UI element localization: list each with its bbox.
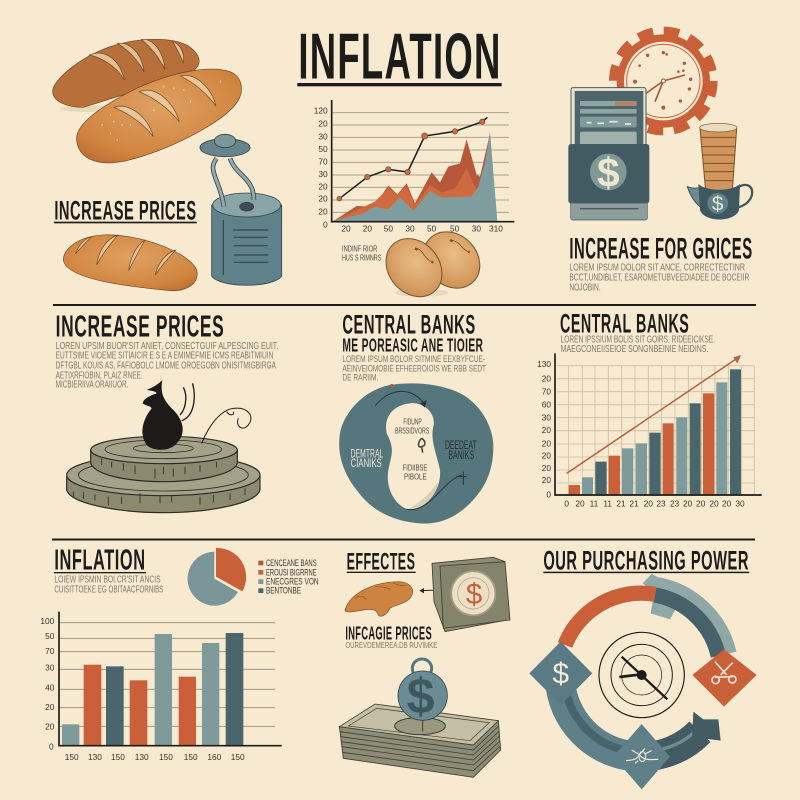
diagram: central bank blob — [339, 383, 493, 524]
diagram: central bank blob: DEEDEAT — [445, 438, 477, 452]
rising bar chart — [537, 353, 762, 508]
icon: bills with dollar medal — [432, 557, 510, 632]
icon: bird silhouette — [142, 380, 251, 450]
panel: effects and purchasing power — [339, 545, 757, 789]
icon: dark bread loaf — [53, 39, 199, 112]
subheading: ME POREASIC ANE TIOIER — [342, 335, 483, 356]
text block: central banks body — [342, 354, 486, 382]
panel: main title and area chart — [297, 19, 514, 308]
area and line chart: 30 — [318, 169, 328, 179]
rising bar chart: 11 — [603, 498, 612, 508]
rising bar chart: 23 — [656, 498, 666, 508]
pie legend — [258, 558, 319, 596]
diagram: central bank blob: DEMTRAL — [351, 446, 384, 460]
text block: central banks right body — [561, 334, 715, 355]
divider: lower rule — [52, 538, 755, 540]
chart caption: INDINF RIOR — [342, 244, 377, 254]
rising bar chart: 21 — [629, 498, 639, 508]
icon: clock target — [599, 632, 684, 718]
bar chart: 100 — [40, 616, 55, 626]
icon: money stack with weight — [339, 659, 501, 777]
area and line chart: 70 — [318, 157, 328, 167]
heading: central banks: CENTRAL BANKS — [342, 309, 476, 339]
text block: inflation body: CUISITTOEKE EG OBITAACFORNIBS — [54, 584, 164, 595]
area and line chart: 50 — [427, 224, 437, 234]
panel: increase prices middle — [56, 310, 278, 513]
panel: inflation charts — [40, 544, 319, 762]
icon: small bread loaf — [63, 235, 197, 291]
text block: prices body: LOREN UPSIM BUOR'SIT ANIET, CONSECTGUIF ALPESCING EUIT. — [56, 341, 278, 352]
rising bar chart: 20 — [542, 425, 551, 435]
diagram: purchasing power cycle — [529, 574, 757, 789]
rising bar chart: 20 — [542, 373, 551, 383]
icon: cash machine: $ — [597, 150, 620, 196]
bar chart: 30 — [45, 663, 55, 673]
rising bar chart: 20 — [542, 451, 551, 461]
diagram: central bank blob: CIANIKS — [351, 456, 382, 470]
divider: upper rule — [53, 304, 756, 306]
icon: bread slice — [345, 582, 413, 616]
rising bar chart: 20 — [696, 498, 706, 508]
bar chart: 40 — [45, 683, 55, 693]
area and line chart: 30 — [405, 224, 415, 234]
text block: grices body — [569, 263, 749, 293]
area and line chart: 50 — [450, 224, 460, 234]
title — [297, 19, 502, 92]
text block: central banks body: LOREM IPSUM BOLOR SITMINE EEXBYFCUE- — [342, 354, 485, 364]
bar chart: 150 — [111, 752, 125, 762]
bar chart: 70 — [45, 646, 55, 656]
icon: gear clock — [614, 32, 713, 130]
icon: tin can with lid — [200, 134, 282, 285]
bar chart: 160 — [207, 752, 222, 762]
text block: prices body: DFTGBL KOUIS AS, FAFIOBOLC LMOME OROEGOBN ONISITMIGBIRGA — [56, 361, 276, 372]
icon: large bread loaf — [77, 69, 241, 163]
pie chart — [188, 548, 246, 606]
area and line chart: 310 — [489, 224, 503, 234]
heading: effectes: EFFECTES — [347, 548, 415, 575]
panel: savings machine and rising costs — [568, 32, 753, 293]
text block: prices body: EUTTSIME VIOEME SITIAICIR E S E A EMIMEFMIE ICMS REABITMIUIN — [56, 351, 273, 362]
area and line chart: 120 — [314, 106, 328, 116]
icon: coffee cup stack — [687, 123, 752, 219]
pie legend: BENTONBE — [266, 586, 301, 596]
diagram: central bank blob: PIBOLE — [404, 472, 427, 482]
icon: potatoes — [374, 220, 491, 308]
diagram: central bank blob: FIDUNP — [403, 417, 422, 427]
area and line chart: 30 — [318, 131, 328, 141]
text block: infcagie caption: OUREVDEMEREA.DB RUVIMKE — [345, 641, 437, 650]
panel: effects and purchasing power: INFCAGIE PRICES — [345, 622, 432, 643]
chart caption: HUS S RIMNRS — [342, 253, 381, 263]
text block: prices body: MICBIERIIVA ORAIIUOR. — [56, 380, 128, 391]
rising bar chart: 11 — [590, 498, 599, 508]
heading: central banks right: CENTRAL BANKS — [560, 309, 689, 339]
rising bar chart: 60 — [542, 399, 551, 409]
panel: bread and can — [53, 39, 282, 291]
icon: money stack with weight: $ — [407, 668, 435, 724]
heading: inflation — [54, 544, 146, 576]
area and line chart — [314, 100, 514, 234]
rising bar chart: 20 — [683, 498, 693, 508]
area and line chart: 20 — [341, 224, 351, 234]
text block: grices body: NOJOBIN. — [569, 282, 601, 293]
panel: central banks diagram — [339, 309, 762, 524]
rising bar chart: 30 — [542, 412, 551, 422]
text block: central banks body: DE RARIIM. — [342, 372, 378, 382]
text block: central banks right body: LOREN IPSSIUM BOLIS SIT GOIRS. RIDEEICIKSE. — [561, 334, 715, 345]
rising bar chart: 20 — [575, 498, 585, 508]
pie legend: ENECGRES VON — [266, 577, 319, 587]
title: INFLATION — [298, 19, 502, 92]
text block: inflation body — [54, 575, 164, 595]
bar chart: 20 — [45, 721, 55, 731]
area and line chart: 20 — [318, 206, 328, 216]
heading: increase prices: INCREASE PRICES — [56, 310, 224, 344]
pie legend: EROUSI BIGRRNE — [266, 567, 317, 577]
text block: central banks right body: MAEGCONEIISEIOE SONGNBEINIE NEIDINS. — [561, 344, 708, 355]
icon: dollar diamond — [529, 642, 592, 705]
diagram: central bank blob: BRSSIDVORS — [395, 425, 429, 435]
area and line chart: 30 — [472, 224, 481, 234]
rising bar chart: 23 — [670, 498, 680, 508]
bar chart: 20 — [45, 702, 55, 712]
bar chart: 130 — [88, 752, 102, 762]
area and line chart: 0 — [323, 219, 328, 229]
icon: bills with dollar medal: $ — [466, 578, 482, 611]
bar chart: 50 — [45, 631, 55, 641]
rising bar chart: 20 — [542, 438, 551, 448]
text block: central banks body: AEINVEIOMOBIE EFHEEROIOIS WE RBB SEDT — [342, 363, 486, 373]
rising bar chart: 20 — [644, 498, 653, 508]
icon: dollar diamond: $ — [552, 657, 569, 690]
bar chart: 150 — [231, 752, 245, 762]
text block: prices body — [56, 341, 278, 391]
rising bar chart: 130 — [537, 359, 551, 369]
bar chart: 150 — [65, 752, 79, 762]
area and line chart: 20 — [318, 181, 328, 191]
icon: network diamond — [613, 724, 670, 789]
rising bar chart: 20 — [709, 498, 719, 508]
bar chart: 130 — [135, 752, 149, 762]
rising bar chart: 70 — [542, 386, 551, 396]
rising bar chart: 30 — [735, 498, 745, 508]
bar chart: 0 — [49, 741, 54, 751]
chart caption — [342, 244, 381, 263]
icon: coffee cup stack: $ — [712, 193, 724, 216]
bar chart: 150 — [184, 752, 198, 762]
bar chart: 150 — [159, 752, 173, 762]
area and line chart: 50 — [318, 144, 328, 154]
pie legend: CENCEANE BANS — [266, 558, 317, 568]
rising bar chart: 20 — [542, 463, 551, 473]
arrow: money to bread — [419, 588, 437, 593]
heading: effectes — [347, 548, 416, 575]
heading: increase prices: INCREASE PRICES — [54, 195, 197, 225]
diagram: central bank blob: FIDIIBSE — [403, 463, 427, 473]
icon: cash machine — [568, 88, 649, 220]
bar chart — [40, 612, 282, 762]
area and line chart: 20 — [363, 224, 372, 234]
diagram: central bank blob: BANIKS — [448, 448, 474, 462]
area and line chart: 20 — [318, 194, 328, 204]
area and line chart: 50 — [384, 224, 393, 234]
rising bar chart: 0 — [564, 498, 569, 508]
area and line chart: 20 — [318, 119, 328, 129]
rising bar chart: 20 — [542, 475, 551, 485]
text block: prices body: AETIXRFIOBIN, PLAIZ RNEE. — [56, 370, 143, 381]
icon: stacked coins — [67, 436, 260, 513]
rising bar chart: 21 — [616, 498, 626, 508]
heading: inflation: INFLATION — [54, 544, 146, 576]
text block: inflation body: LOIEW IPSMIN BOI.CR'SIT ANCIS — [54, 575, 161, 586]
rising bar chart: 20 — [722, 498, 732, 508]
rising bar chart: 0 — [546, 490, 551, 500]
icon: scissors diamond — [692, 649, 757, 707]
